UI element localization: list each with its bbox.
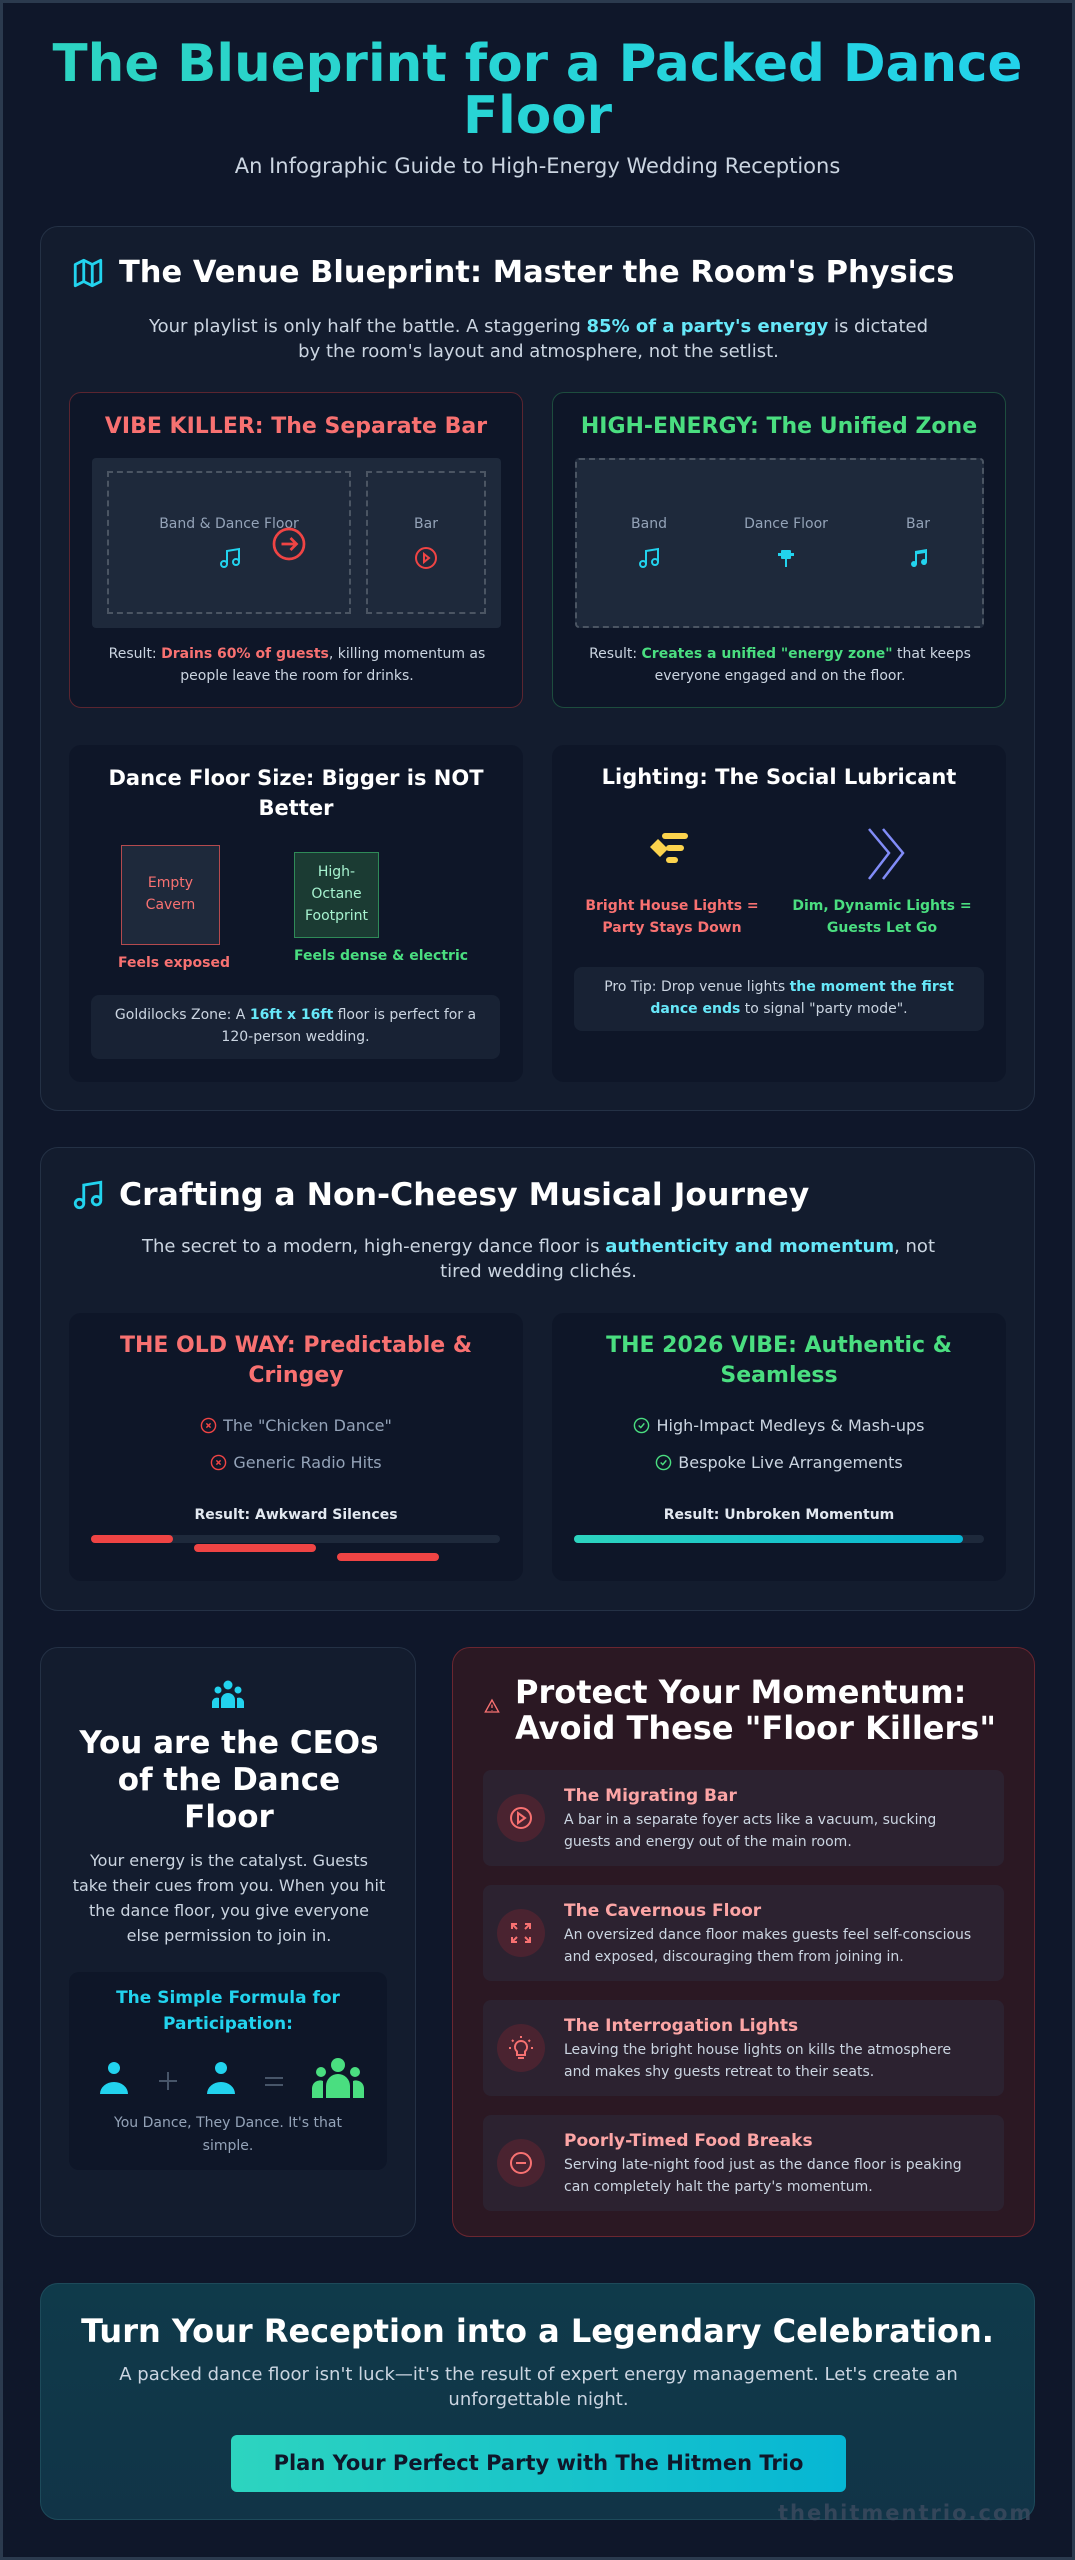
card: old way: THE OLD WAY: Predictable & Cringey — [120, 1333, 472, 1388]
card: vibe killer — [69, 392, 523, 708]
item: migrating bar: The Migrating Bar — [564, 1786, 737, 1806]
icon: bar — [415, 547, 437, 569]
intro text — [142, 1236, 935, 1282]
card: lighting — [552, 745, 1006, 1082]
panel: floor killers: Protect Your Momentum: Avoid These "Floor Killers" — [515, 1673, 996, 1747]
item: food breaks: Poorly-Timed Food Breaks — [564, 2131, 813, 2151]
pro tip: Pro Tip: Drop venue lights the moment the first dance ends to signal "party mode". — [604, 979, 954, 1017]
card: vibe killer: VIBE KILLER: The Separate Bar — [105, 414, 487, 439]
intro text: by the room's layout and atmosphere, not the setlist. — [298, 341, 779, 362]
icon: bright lights — [650, 833, 688, 863]
card: 2026 vibe: Result: Unbroken Momentum — [664, 1507, 894, 1523]
card: unified zone — [552, 392, 1006, 708]
box: high-octane: High- — [318, 864, 355, 880]
goldilocks note — [91, 995, 500, 1059]
icon: dim chevrons — [868, 828, 904, 880]
panel: CEOs — [40, 1647, 416, 2237]
title: The Blueprint for a Packed Dance — [53, 34, 1022, 94]
intro text — [149, 316, 928, 362]
card: lighting: Lighting: The Social Lubricant — [602, 765, 956, 789]
card: 2026 vibe — [552, 1313, 1006, 1581]
diagram: separate bar — [92, 458, 501, 628]
card: lighting: Guests Let Go — [827, 920, 937, 936]
item: migrating bar: A bar in a separate foyer acts like a vacuum, sucking guests and energy out of the main room. — [564, 1812, 936, 1850]
icon: group — [212, 1680, 244, 1708]
card: dance floor size: Feels dense & electric — [294, 948, 468, 964]
formula box — [69, 1972, 387, 2170]
card: old way: Generic Radio Hits — [233, 1453, 382, 1472]
panel: CEOs: Your energy is the catalyst. Guests take their cues from you. When you hit the dance floor, you give everyone else permission to join in. — [73, 1851, 385, 1945]
diagram: unified zone — [575, 458, 984, 628]
card: dance floor size: Feels exposed — [118, 955, 230, 971]
box: empty cavern: Cavern — [146, 897, 195, 913]
item: cavernous floor: The Cavernous Floor — [564, 1901, 761, 1921]
box: high-octane: Octane — [311, 886, 362, 902]
goldilocks note: Goldilocks Zone: A 16ft x 16ft floor is perfect for a 120-person wedding. — [115, 1007, 476, 1045]
diagram: unified zone: Band — [631, 516, 667, 532]
formula box: The Simple Formula for Participation: — [116, 1988, 340, 2034]
box: high-octane — [294, 852, 379, 938]
diagram: unified zone: Bar — [906, 516, 930, 532]
card: vibe killer: Result: Drains 60% of guests, killing momentum as people leave the room for drinks. — [109, 646, 485, 684]
intro text: tired wedding clichés. — [440, 1261, 637, 1282]
intro text: The secret to a modern, high-energy dance floor is authenticity and momentum, not — [142, 1236, 935, 1257]
item: food breaks — [483, 2115, 1004, 2211]
item: migrating bar — [483, 1770, 1004, 1866]
card: lighting: Party Stays Down — [602, 920, 742, 936]
title — [0, 38, 1075, 142]
panel: call to action: A packed dance floor isn't luck—it's the result of expert energy management. Let's create an unforgettable night. — [119, 2364, 958, 2410]
item: interrogation lights — [483, 2000, 1004, 2096]
heading: venue blueprint: The Venue Blueprint: Master the Room's Physics — [119, 255, 954, 290]
item: cavernous floor — [483, 1885, 1004, 1981]
formula box: You Dance, They Dance. It's that simple. — [114, 2115, 342, 2154]
watermark: thehitmentrio.com — [778, 2501, 1033, 2525]
bar: momentum — [574, 1535, 984, 1543]
panel: floor killers — [452, 1647, 1035, 2237]
button: Plan Your Perfect Party with The Hitmen Trio — [274, 2451, 803, 2475]
button — [231, 2435, 846, 2492]
item: food breaks: Serving late-night food just as the dance floor is peaking can completely halt the party's momentum. — [564, 2157, 962, 2195]
card: dance floor size: Dance Floor Size: Bigger is NOT Better — [108, 766, 484, 820]
card: old way — [69, 1313, 523, 1581]
title: Floor — [463, 86, 612, 146]
box: empty cavern — [121, 845, 220, 945]
heading: floor killers — [484, 1698, 500, 1713]
diagram: unified zone: Dance Floor — [744, 516, 828, 532]
pro tip — [574, 967, 984, 1031]
icon: music note — [220, 548, 240, 568]
card: dance floor size — [69, 745, 523, 1082]
card: lighting: Bright House Lights = — [585, 898, 759, 914]
card: 2026 vibe: High-Impact Medleys & Mash-ups — [656, 1416, 924, 1435]
panel: call to action — [40, 2283, 1035, 2520]
panel: call to action: Turn Your Reception into a Legendary Celebration. — [81, 2312, 994, 2350]
panel: musical journey — [40, 1147, 1035, 1611]
icon: formula — [100, 2058, 364, 2098]
panel: venue blueprint — [40, 226, 1035, 1111]
intro text: Your playlist is only half the battle. A staggering 85% of a party's energy is dictated — [149, 316, 928, 337]
icon: map — [74, 258, 102, 288]
card: old way: The "Chicken Dance" — [223, 1416, 392, 1435]
icon: arrow out — [272, 528, 306, 560]
diagram: separate bar: Bar — [414, 516, 438, 532]
heading: CEOs: You are the CEOs of the Dance Floor — [79, 1725, 379, 1835]
bar: awkward — [91, 1535, 500, 1543]
diagram: separate bar: Band & Dance Floor — [159, 516, 299, 532]
box: empty cavern: Empty — [148, 875, 193, 891]
item: cavernous floor: An oversized dance floor makes guests feel self-conscious and exposed, discouraging them from joining in. — [564, 1927, 971, 1965]
card: 2026 vibe: Bespoke Live Arrangements — [678, 1453, 903, 1472]
card: lighting: Dim, Dynamic Lights = — [792, 898, 972, 914]
item: interrogation lights: Leaving the bright house lights on kills the atmosphere and makes shy guests retreat to their seats. — [564, 2042, 951, 2080]
heading: musical journey: Crafting a Non-Cheesy Musical Journey — [119, 1177, 809, 1213]
item: interrogation lights: The Interrogation Lights — [564, 2016, 798, 2036]
card: old way: Result: Awkward Silences — [194, 1507, 398, 1523]
card: 2026 vibe: THE 2026 VIBE: Authentic & Seamless — [606, 1333, 952, 1388]
card: unified zone: Result: Creates a unified "energy zone" that keeps everyone engaged and on the floor. — [589, 646, 971, 684]
card: unified zone: HIGH-ENERGY: The Unified Zone — [581, 414, 977, 439]
subtitle: An Infographic Guide to High-Energy Wedding Receptions — [235, 154, 840, 178]
box: high-octane: Footprint — [305, 908, 368, 924]
